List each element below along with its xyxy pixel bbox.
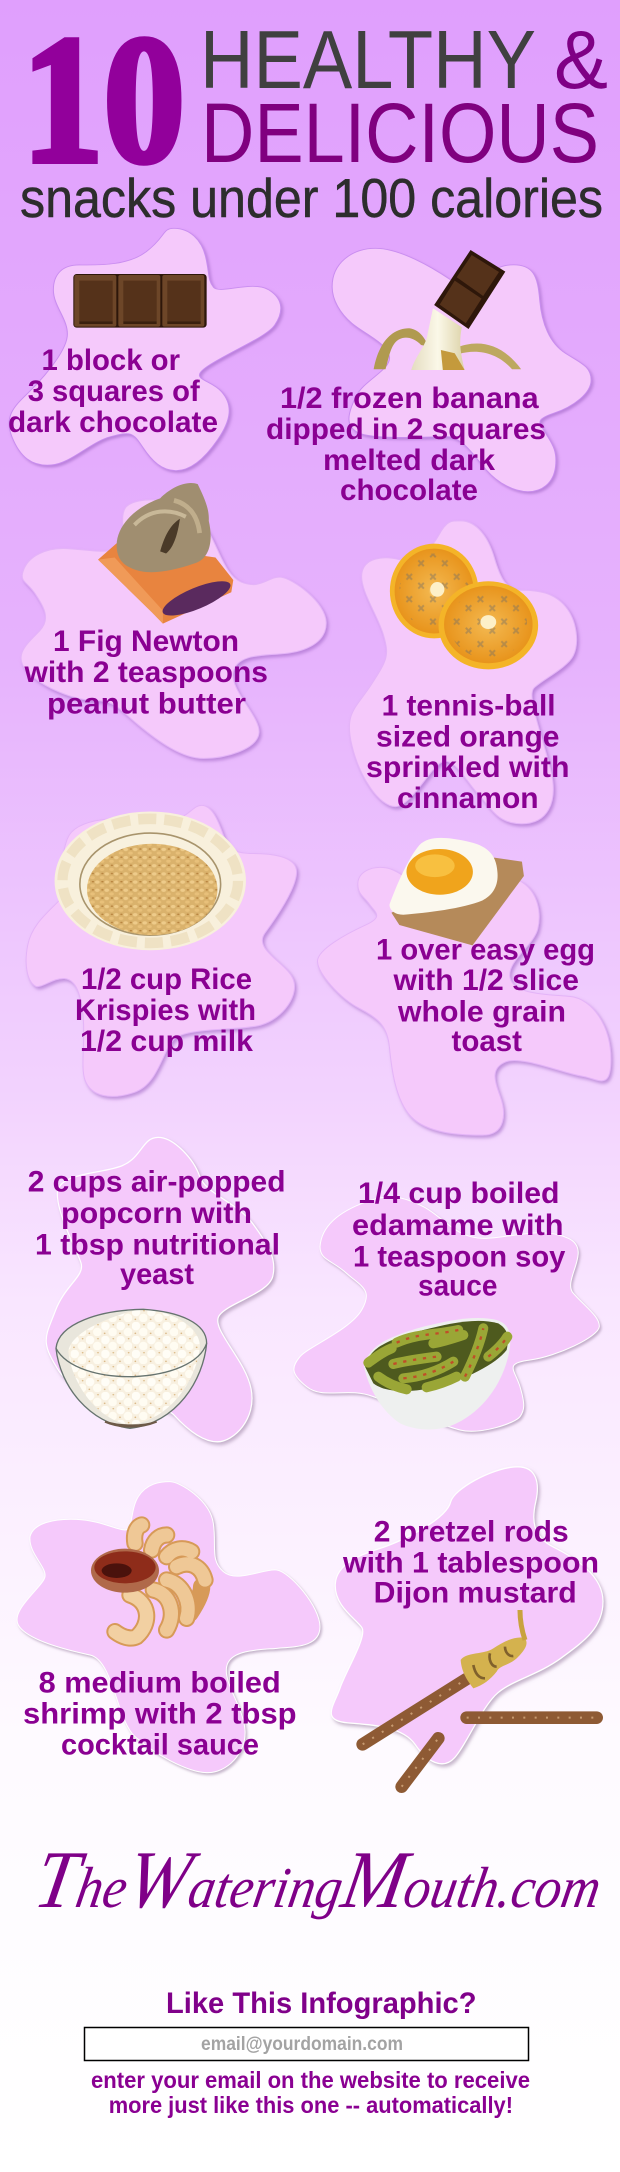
text (266, 382, 546, 507)
text: with 1 tablespoon (342, 1546, 599, 1579)
title (20, 0, 608, 229)
text: with 2 teaspoons (23, 656, 268, 689)
text: 1 teaspoon soy (353, 1241, 566, 1274)
text: yeast (120, 1258, 194, 1291)
text: 2 pretzel rods (374, 1516, 569, 1548)
blob (26, 805, 297, 1096)
text (28, 1166, 285, 1291)
email placeholder: email@yourdomain.com (201, 2034, 403, 2055)
text: dipped in 2 squares (266, 413, 546, 446)
panel: edamame (294, 1177, 599, 1431)
panel: dark chocolate (8, 228, 281, 471)
text: 1/2 cup Rice (81, 963, 252, 996)
text: cocktail sauce (61, 1728, 259, 1761)
call to action (84, 1987, 530, 2118)
text: dark chocolate (8, 406, 218, 439)
icon: orange slices (390, 544, 538, 669)
blob (294, 1197, 599, 1431)
text: shrimp with 2 tbsp (23, 1698, 297, 1731)
panel: frozen banana (266, 248, 591, 507)
icon: chocolate bar (73, 274, 207, 328)
big number 10: 10 (22, 0, 185, 201)
blob (331, 1467, 603, 1764)
text: 1/2 frozen banana (280, 382, 539, 415)
instruction text (91, 2067, 530, 2118)
text: edamame with (352, 1209, 564, 1242)
icon: pretzels with mustard (363, 1610, 597, 1787)
email box (84, 2028, 528, 2060)
icon: bowl of cereal (55, 811, 246, 950)
text: 1 over easy egg (376, 934, 595, 967)
text: 8 medium boiled (39, 1666, 281, 1699)
text: 1/2 cup milk (80, 1025, 253, 1058)
text (352, 1177, 566, 1303)
instruction text: more just like this one -- automatically! (109, 2092, 513, 2118)
logo: TheWateringMouth.com (29, 1834, 610, 1925)
text: Dijon mustard (374, 1577, 577, 1610)
text: sprinkled with (366, 751, 570, 784)
icon: bowl of edamame (364, 1318, 510, 1430)
blob (349, 521, 577, 824)
text: 2 cups air-popped (28, 1166, 285, 1198)
text: 1 tbsp nutritional (35, 1228, 280, 1261)
panel: orange (349, 521, 577, 824)
text: sized orange (376, 720, 560, 754)
panel: pretzel rods (331, 1467, 603, 1787)
text (23, 1666, 297, 1761)
text (376, 934, 595, 1058)
text: 1/4 cup boiled (358, 1177, 560, 1210)
heading: healthy: HEALTHY (200, 13, 536, 106)
text: popcorn with (61, 1197, 252, 1230)
text: 1 block or (42, 344, 180, 377)
blob (17, 1482, 320, 1773)
panel: fig newton (21, 483, 326, 758)
blob (332, 248, 591, 492)
heading: ampersand: & (554, 13, 608, 106)
panel: popcorn (28, 1137, 285, 1442)
icon: shrimp with cocktail sauce (91, 1525, 205, 1638)
text (342, 1516, 599, 1610)
icon: fried egg on toast (389, 838, 524, 945)
text: 1 tennis-ball (382, 690, 556, 722)
instruction text: enter your email on the website to receive (91, 2067, 530, 2093)
text (23, 625, 268, 720)
text: with 1/2 slice (392, 964, 579, 997)
panel: shrimp (17, 1482, 320, 1773)
text (366, 690, 570, 815)
panel: egg on toast (317, 838, 611, 1135)
text: Krispies with (75, 994, 256, 1027)
text: toast (452, 1025, 522, 1058)
icon: banana dipped in chocolate (374, 250, 521, 370)
blob (317, 867, 611, 1135)
panel: rice krispies (26, 805, 297, 1096)
text: peanut butter (47, 688, 246, 720)
text (8, 344, 218, 439)
heading: like this infographic: Like This Infographic? (166, 1987, 476, 2020)
icon: bowl of popcorn (56, 1308, 207, 1428)
icon: fig newton with peanut butter (98, 483, 234, 624)
text: 1 Fig Newton (53, 625, 239, 658)
blob (21, 500, 326, 758)
text (75, 963, 256, 1058)
text: melted dark (323, 444, 495, 477)
text: sauce (418, 1270, 497, 1303)
blob (9, 228, 281, 471)
text: whole grain (397, 996, 566, 1029)
text: 3 squares of (28, 375, 201, 408)
text: chocolate (340, 474, 478, 507)
text: cinnamon (397, 782, 539, 815)
blob (46, 1137, 274, 1442)
